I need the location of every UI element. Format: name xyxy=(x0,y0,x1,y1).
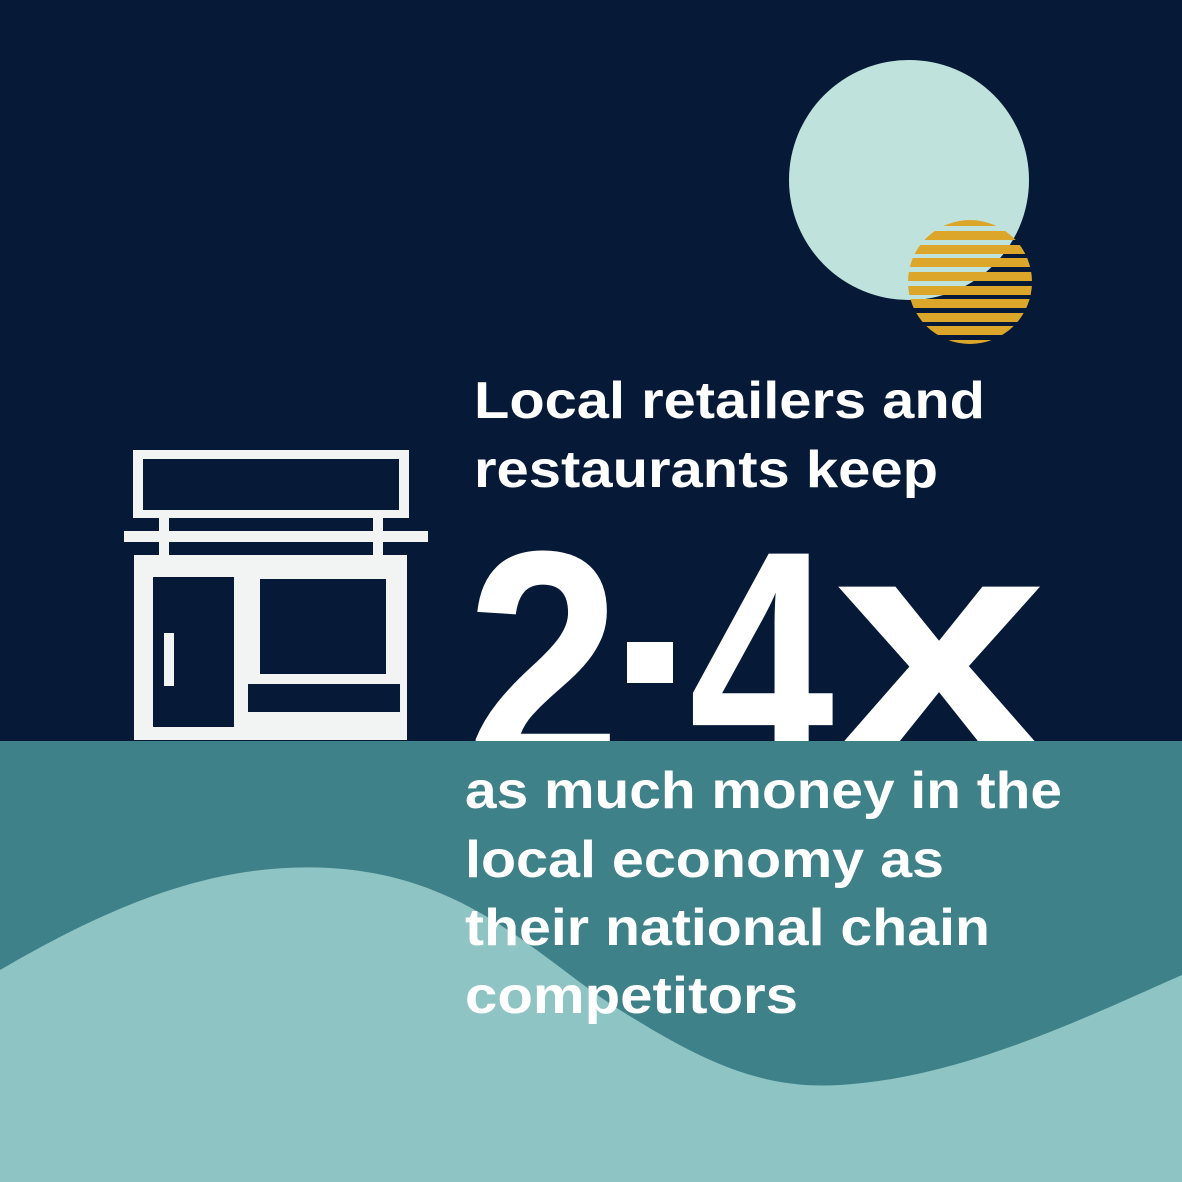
light wave xyxy=(0,867,1182,1182)
text: body statement: their national chain xyxy=(465,899,990,957)
big number 2-4x xyxy=(466,470,1049,836)
big number 2-4x: x xyxy=(832,470,1049,819)
heading: intro text: Local retailers and xyxy=(474,372,985,430)
icon: storefront xyxy=(124,450,428,740)
text: body statement xyxy=(465,762,1062,1025)
heading: intro text: restaurants keep xyxy=(474,441,938,499)
icon: moon circle xyxy=(789,60,1029,300)
big number 2-4x: 2 xyxy=(466,487,621,836)
icon: striped sun xyxy=(908,220,1032,344)
text: body statement: competitors xyxy=(465,967,798,1025)
text: body statement: local economy as xyxy=(465,831,944,889)
teal band xyxy=(0,741,1182,1182)
big number 2-4x: 4 xyxy=(689,487,836,836)
heading: intro text xyxy=(474,372,985,499)
text: body statement: as much money in the xyxy=(465,762,1062,820)
